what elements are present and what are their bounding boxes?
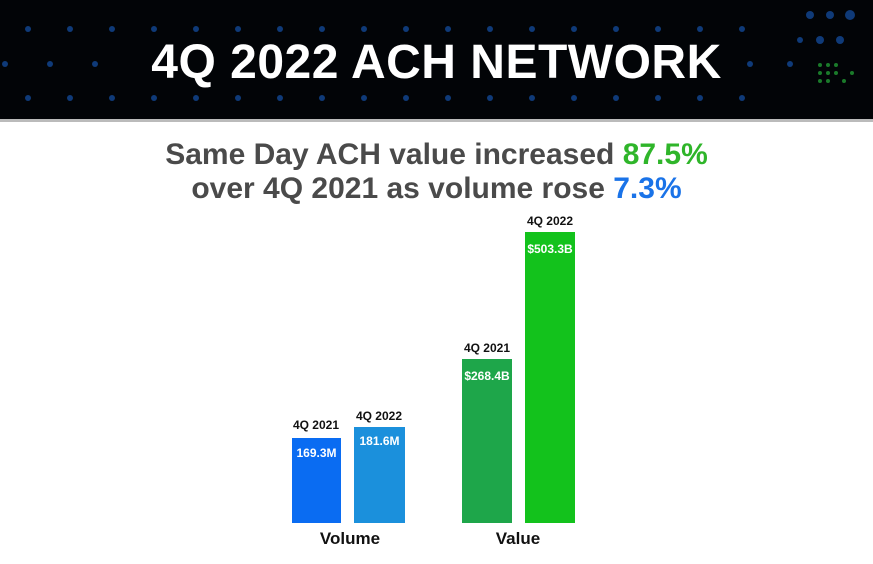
bar: volume 4Q 2022 [354,427,405,523]
bar chart: value [462,214,575,548]
bar: volume 4Q 2021 [292,438,341,523]
bar: value 4Q 2022: $503.3B [527,242,573,256]
bar chart: volume [292,409,405,548]
bar chart: value: 4Q 2021 [464,341,510,355]
bar: value 4Q 2021 [462,359,512,523]
bar chart: volume: 4Q 2021 [293,418,339,432]
bar chart: volume: 4Q 2022 [356,409,402,423]
title: 4Q 2022 ACH NETWORK [151,36,722,89]
bar: volume 4Q 2021: 169.3M [296,446,337,460]
header banner [0,0,873,120]
axis label: Value: Value [496,529,540,548]
subtitle: over 4Q 2021 as volume rose 7.3% [191,172,682,205]
subtitle: Same Day ACH value increased 87.5% [165,138,708,171]
bar: value 4Q 2021: $268.4B [464,369,510,383]
bar: value 4Q 2022 [525,232,575,523]
subtitle [165,138,708,205]
bar chart: value: 4Q 2022 [527,214,573,228]
bar: volume 4Q 2022: 181.6M [359,434,400,448]
axis label: Volume: Volume [320,529,380,548]
